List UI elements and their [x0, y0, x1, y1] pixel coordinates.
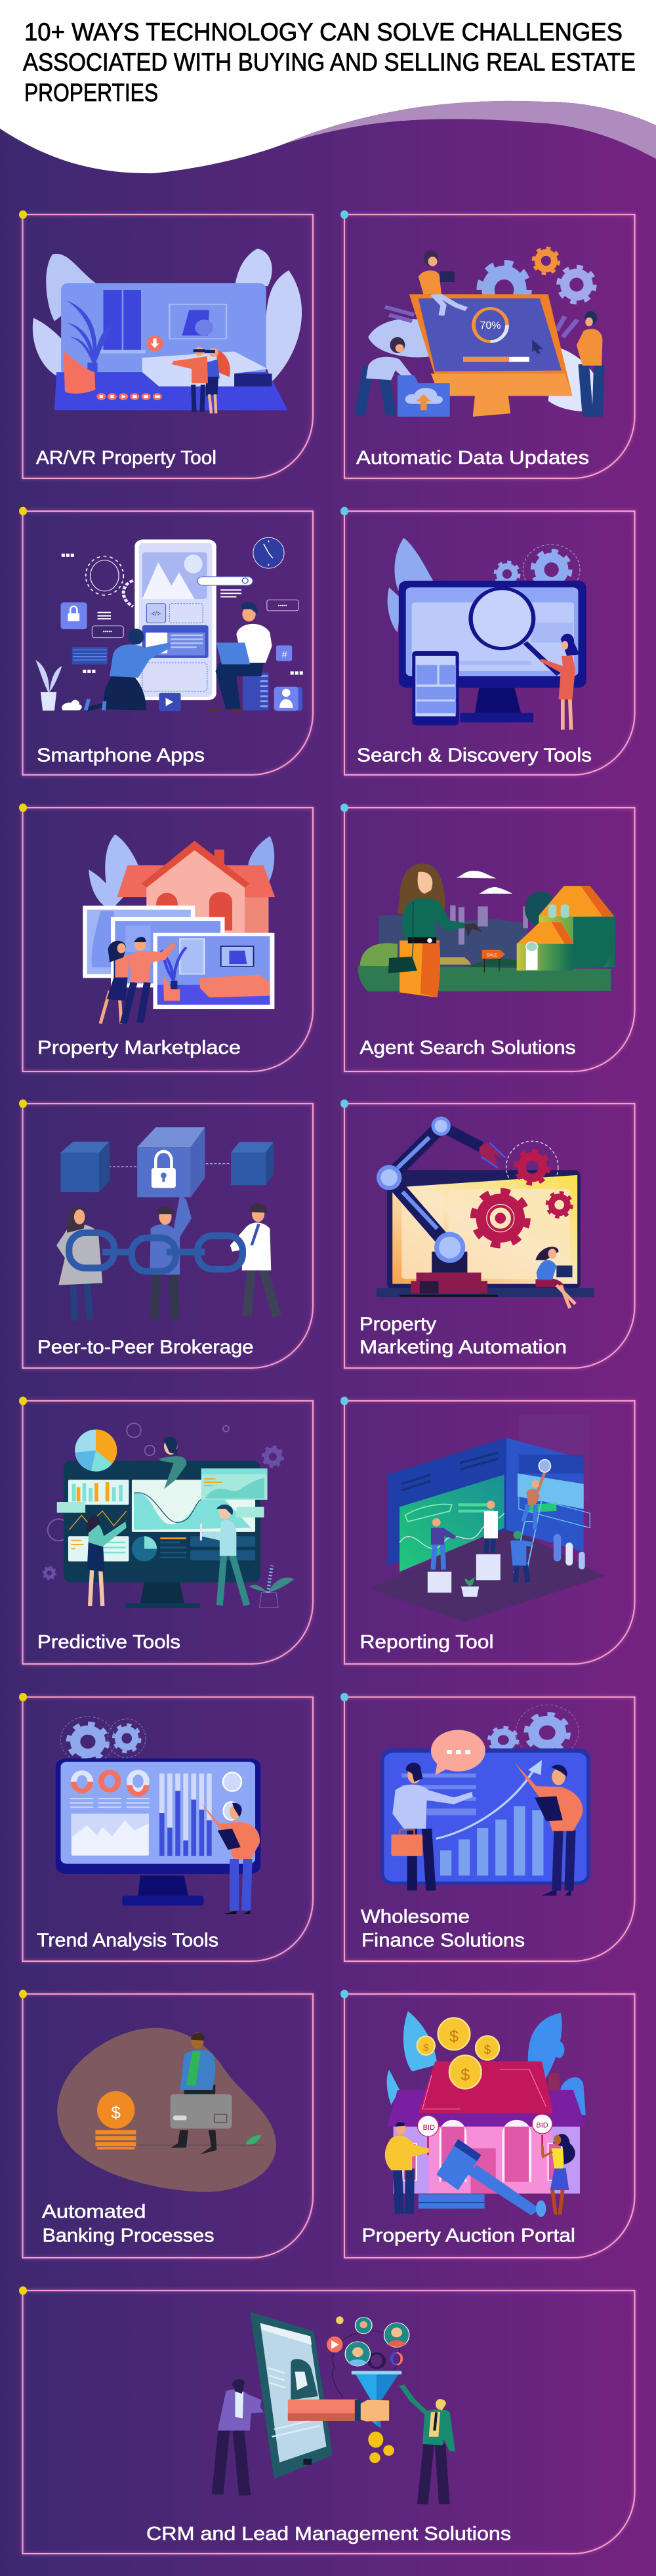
illustration: house auction with gavel and coins: $	[449, 2027, 459, 2046]
marker dot	[340, 1693, 348, 1701]
white header wave	[0, 0, 656, 173]
marker dot	[340, 803, 348, 812]
illustration: smartphone UI with two developers	[35, 537, 303, 711]
illustration: analytics dashboard with people and pie chart	[43, 1423, 294, 1608]
label: Search & Discovery Tools	[357, 745, 592, 766]
illustration: analytics monitor with analyst	[56, 1716, 260, 1914]
marker dot	[19, 507, 27, 516]
illustration: isometric report wall with team	[370, 1415, 605, 1622]
illustration: house auction with gavel and coins: $	[423, 2042, 429, 2053]
label: Trend Analysis Tools	[37, 1930, 218, 1951]
illustration: laptop with robot arm and gears	[377, 1117, 594, 1308]
marker dot	[340, 1989, 348, 1999]
illustration: monitor with loading progress and people	[360, 248, 603, 417]
marker dot	[340, 1396, 348, 1405]
label: Property Auction Portal	[362, 2226, 575, 2247]
illustration: house auction with gavel and coins: BID	[423, 2124, 435, 2132]
panel: Property Auction Portal	[340, 1989, 635, 2258]
label: Wholesome	[361, 1907, 470, 1928]
illustration: house auction with gavel and coins: $	[461, 2066, 470, 2085]
illustration: smartphone UI with two developers: •••••	[103, 629, 112, 634]
illustration: real estate agent with houses: SALE	[487, 953, 498, 957]
card frame	[22, 511, 313, 775]
panel: Automatic Data Updates	[340, 210, 635, 478]
illustration: smartphone UI with two developers: </>	[152, 611, 161, 618]
panel: Automated Banking Processes	[19, 1989, 313, 2258]
panel: AR/VR Property Tool	[19, 210, 313, 478]
panel: Property Marketplace	[19, 803, 313, 1071]
label line two: Banking Processes	[42, 2226, 214, 2247]
label line two: Marketing Automation	[359, 1337, 567, 1358]
panel: Agent Search Solutions	[340, 803, 635, 1071]
label: Peer-to-Peer Brokerage	[37, 1337, 253, 1358]
marker dot	[340, 1100, 348, 1108]
label: Property Marketplace	[37, 1037, 241, 1058]
label: Property	[359, 1314, 437, 1335]
panel: Reporting Tool	[340, 1396, 635, 1664]
illustration: house auction with gavel and coins: BID	[536, 2122, 548, 2130]
label: AR/VR Property Tool	[36, 447, 216, 468]
marker dot	[19, 210, 27, 219]
illustration: house auction with gavel and coins: $	[484, 2043, 491, 2057]
panel: Trend Analysis Tools	[19, 1693, 313, 1961]
card frame	[22, 1401, 313, 1664]
label: Smartphone Apps	[37, 745, 205, 766]
illustration: house auction with gavel and coins	[385, 2011, 586, 2217]
card frame	[344, 1994, 635, 2258]
label: Automatic Data Updates	[356, 447, 589, 468]
marker dot	[19, 2286, 27, 2295]
panel: Peer-to-Peer Brokerage	[19, 1100, 313, 1368]
panel: Property Marketing Automation	[340, 1100, 635, 1368]
card frame	[344, 1401, 635, 1664]
panel: Search & Discovery Tools	[340, 507, 635, 775]
card frame	[22, 1697, 313, 1961]
title: 10+ WAYS TECHNOLOGY CAN SOLVE CHALLENGES	[24, 18, 623, 46]
lilac header wave	[285, 101, 656, 159]
illustration: smartphone UI with two developers: #	[282, 649, 288, 660]
title	[23, 18, 636, 107]
illustration: smartphone UI with two developers: •••••	[278, 602, 287, 608]
card frame	[22, 1994, 313, 2258]
illustration: blockchain cubes with people linked by chain	[56, 1127, 277, 1321]
panel: Predictive Tools	[19, 1396, 313, 1664]
card frame	[22, 808, 313, 1071]
illustration: finance growth chart with two men	[380, 1705, 590, 1896]
illustration: monitor with magnifier, tablet and woman	[388, 538, 586, 730]
illustration: real estate agent with houses	[358, 863, 616, 997]
marker dot	[340, 507, 348, 516]
card frame	[344, 808, 635, 1071]
card frame	[344, 1697, 635, 1961]
marker dot	[340, 210, 348, 219]
label line two: Finance Solutions	[361, 1930, 525, 1951]
label: Automated	[42, 2201, 146, 2222]
marker dot	[19, 803, 27, 812]
marker dot	[19, 1693, 27, 1701]
label: Reporting Tool	[359, 1632, 493, 1653]
marker dot	[19, 1396, 27, 1405]
label: CRM and Lead Management Solutions	[146, 2524, 511, 2545]
illustration: man carrying credit card beside coin on blob	[57, 2028, 276, 2192]
card frame	[22, 1104, 313, 1368]
panel: Wholesome Finance Solutions	[340, 1693, 635, 1961]
marker dot	[19, 1989, 27, 1999]
card frame	[22, 2291, 635, 2554]
label: Agent Search Solutions	[359, 1037, 576, 1058]
marker dot	[19, 1100, 27, 1108]
illustration: phone with lead funnel, hand and people	[218, 2312, 455, 2504]
card frame	[344, 1104, 635, 1368]
panel: CRM and Lead Management Solutions	[19, 2286, 635, 2554]
panel: Smartphone Apps	[19, 507, 313, 775]
illustration: monitor with loading progress and people: 70%	[480, 320, 501, 331]
illustration: man carrying credit card beside coin on blob: $	[111, 2102, 121, 2122]
card frame	[344, 215, 635, 478]
illustration: house with photo frames and couple	[83, 835, 275, 1024]
title: PROPERTIES	[24, 79, 158, 107]
card frame	[344, 511, 635, 775]
label: Predictive Tools	[37, 1632, 180, 1653]
illustration: virtual bedroom with VR couple	[33, 249, 302, 413]
card frame	[22, 215, 313, 478]
